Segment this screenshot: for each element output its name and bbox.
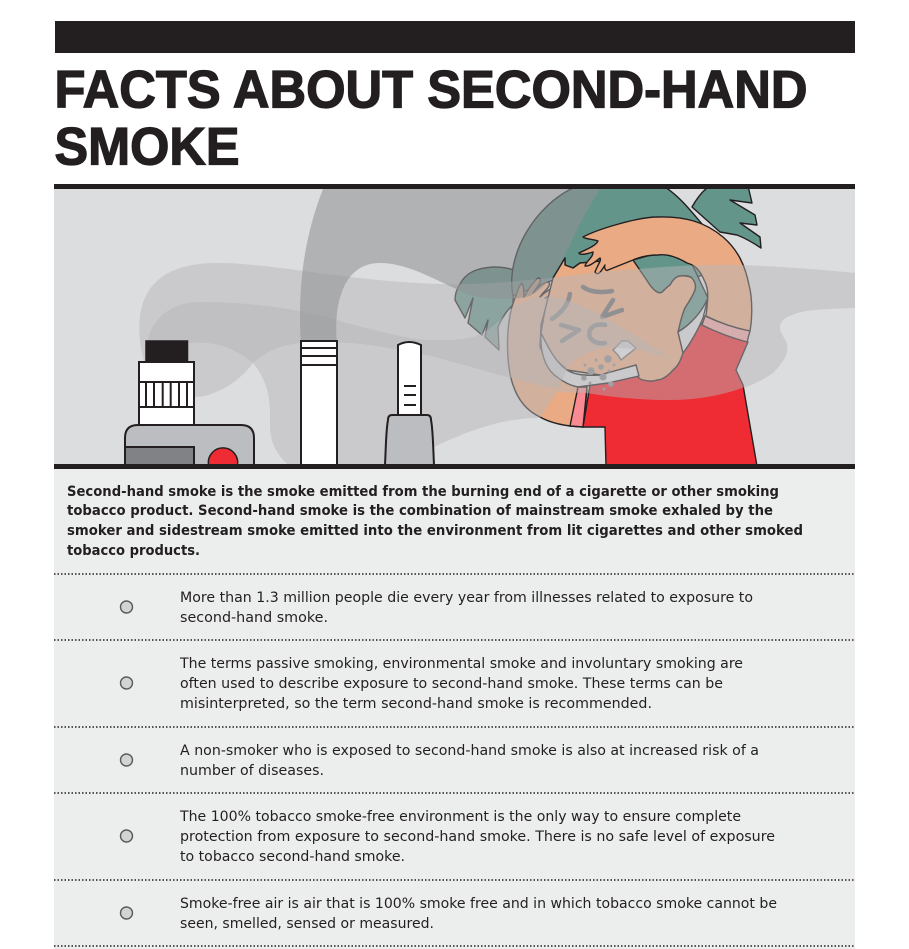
intro paragraph: Second-hand smoke is the smoke emitted from the burning end of a cigarette or other smoking [67,484,779,500]
fact 2 [120,656,743,712]
fact 3: number of diseases. [180,763,324,779]
image bottom rule [54,464,855,469]
illustration panel [54,186,855,466]
fact 1: More than 1.3 million people die every year from illnesses related to exposure to [180,590,753,606]
shirt [583,322,757,466]
intro paragraph: smoker and sidestream smoke emitted into the environment from lit cigarettes and other smoked [67,523,803,539]
open mouth [541,333,639,387]
title: FACTS ABOUT SECOND-HAND [54,61,808,120]
image top rule [54,184,855,189]
hair [511,189,703,296]
smoke band: wide outer plume [139,263,855,466]
right pigtail [692,186,761,248]
collar shadow [678,298,708,353]
neck strap [570,387,587,427]
fact 2: often used to describe exposure to second-hand smoke. These terms can be [180,676,723,692]
fact 2: misinterpreted, so the term second-hand smoke is recommended. [180,696,652,712]
face and ear [541,258,696,381]
device screen [125,447,194,465]
smoke band: inner plume [147,297,673,389]
strap on shoulder [702,316,750,342]
cough droplets [581,355,616,390]
device tank [139,362,194,425]
fact 3: A non-smoker who is exposed to second-hand smoke is also at increased risk of a [180,743,759,759]
left pigtail [455,267,514,350]
intro paragraph: tobacco product. Second-hand smoke is the combination of mainstream smoke exhaled by the [67,503,773,519]
fact 5 [120,896,777,932]
hair behind ear [633,253,708,332]
red button [208,448,238,465]
top header bar [55,21,855,53]
icon: cigarette [301,341,337,466]
fact 4: protection from exposure to second-hand smoke. There is no safe level of exposure [180,829,775,845]
fact 4: The 100% tobacco smoke-free environment is the only way to ensure complete [179,809,741,825]
device cap [146,341,188,362]
fact 1: second-hand smoke. [180,610,328,626]
smoke clouds [139,189,855,466]
icon: heated tobacco stick [385,342,434,465]
device base [125,425,254,465]
fact 4 [120,809,775,865]
fact 5: Smoke-free air is air that is 100% smoke free and in which tobacco smoke cannot be [180,896,777,912]
fact 5: seen, smelled, sensed or measured. [180,916,434,932]
tooth [613,341,636,360]
left arm and hand [508,278,587,427]
intro paragraph: tobacco products. [67,543,200,559]
fact 3 [120,743,759,779]
person coughing in smoke [455,186,761,466]
text panel [54,469,855,949]
smoke column from cigarette [300,189,600,345]
eyebrow and eye marks [552,287,622,343]
intro paragraph [67,484,803,559]
fact 1 [120,590,753,626]
fact 2: The terms passive smoking, environmental smoke and involuntary smoking are [179,656,743,672]
title: SMOKE [54,118,240,177]
title [54,61,808,177]
top arm and hand [579,217,752,331]
fact 4: to tobacco second-hand smoke. [180,849,405,865]
icon: e-cigarette device [125,341,254,465]
